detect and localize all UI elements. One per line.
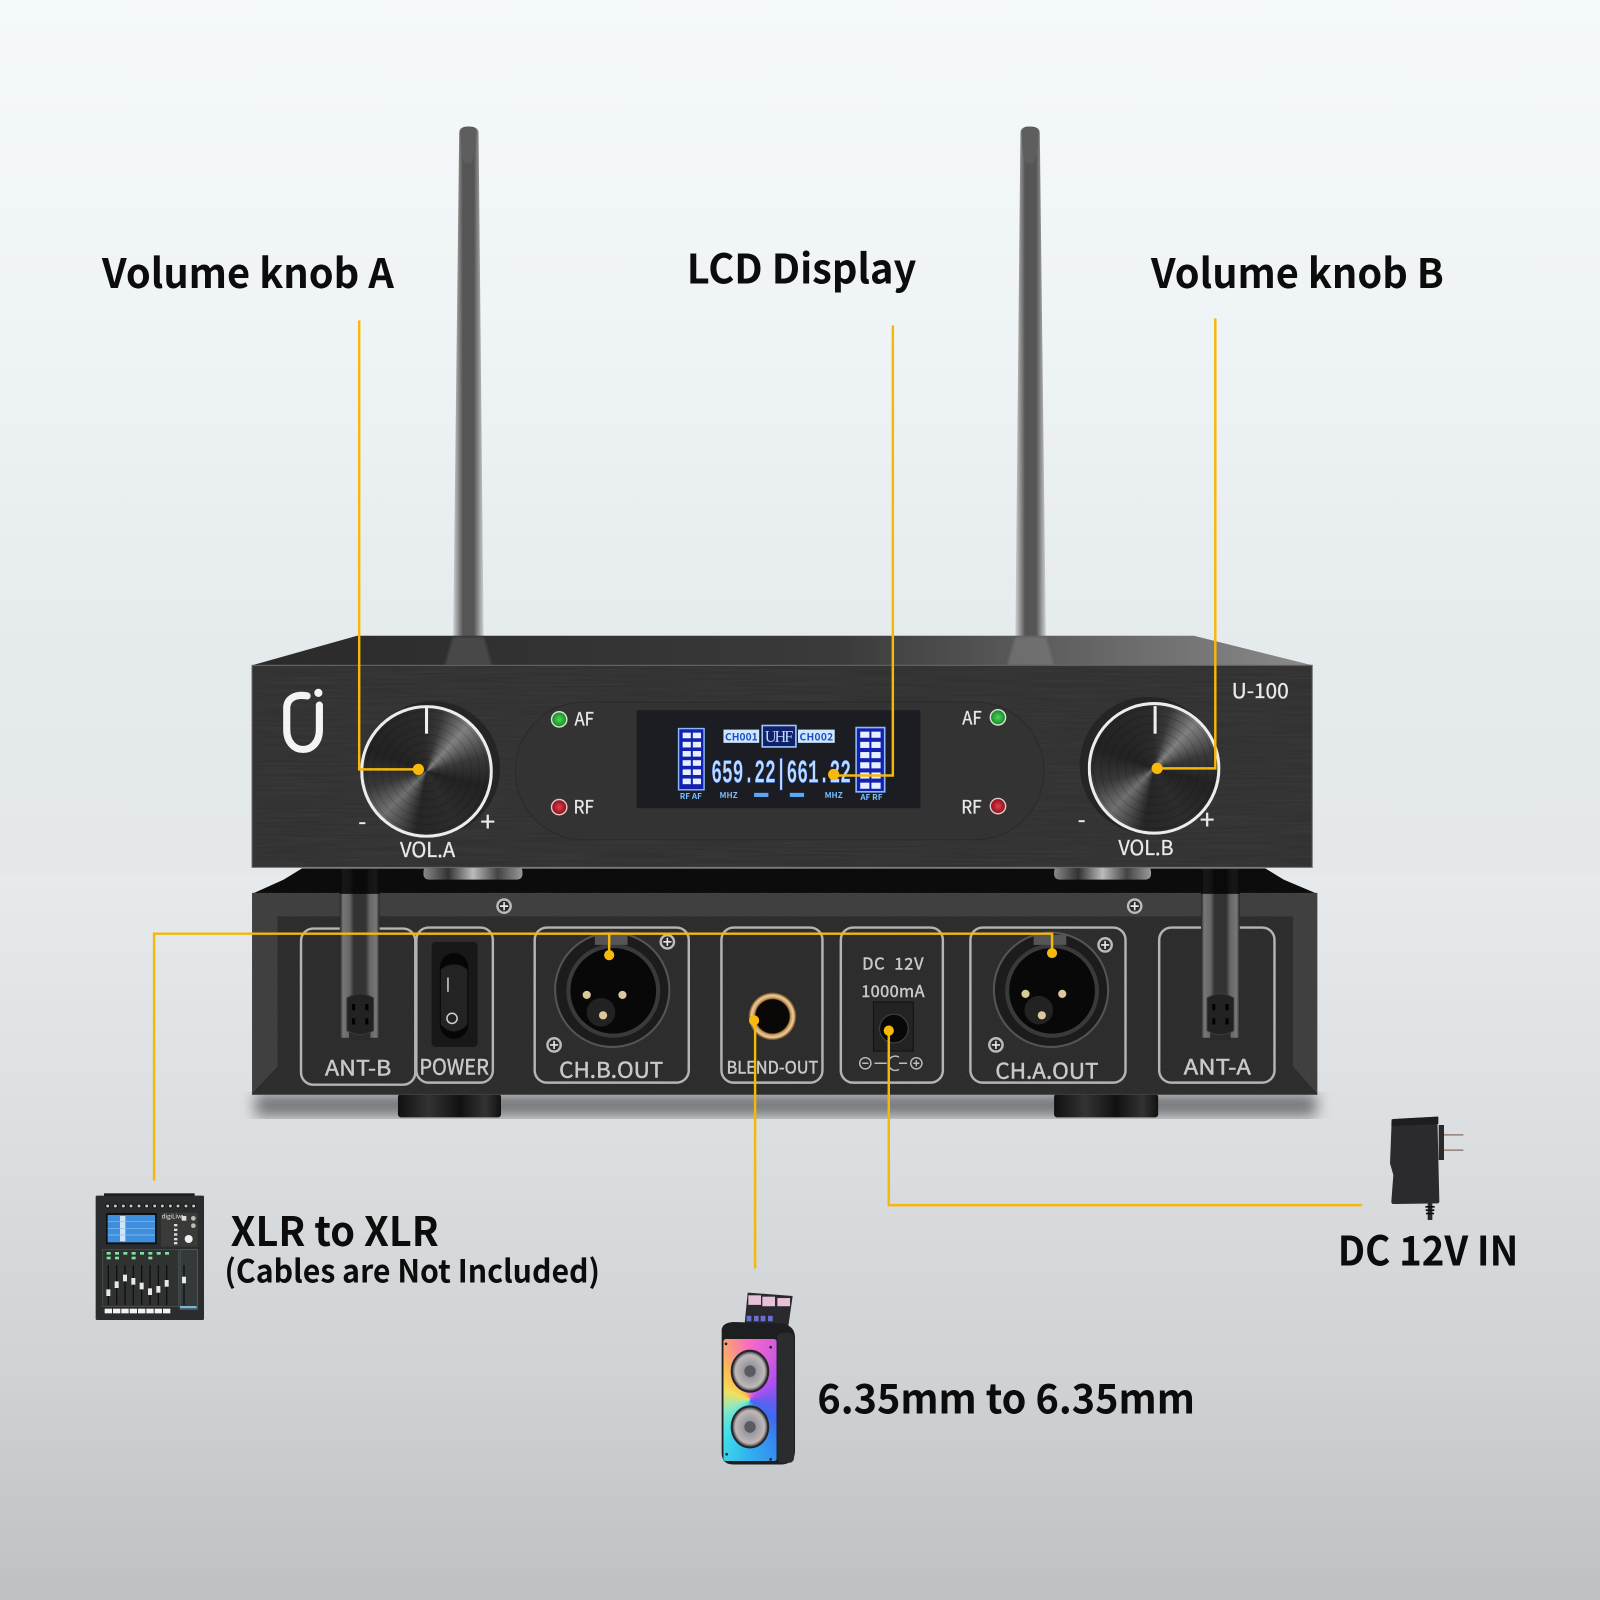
brushed texture bbox=[253, 666, 1311, 866]
label box: ANT-B bbox=[301, 929, 415, 1085]
LED RF left bbox=[552, 793, 594, 819]
label box: BLEND-OUT bbox=[721, 928, 822, 1083]
label box: ANT-A bbox=[1159, 928, 1274, 1083]
label box: CH.B.OUT bbox=[535, 928, 689, 1085]
small LCD captions: MHZ bbox=[720, 790, 738, 801]
oval centre panel bbox=[515, 702, 1044, 840]
label box: POWER bbox=[416, 928, 493, 1083]
frequency readout: 659.22|661.22 bbox=[711, 756, 851, 794]
rear chassis bbox=[252, 893, 1317, 1095]
power switch bbox=[432, 942, 478, 1047]
heading: Volume knob A: Volume knob A bbox=[101, 241, 395, 300]
rear grain bbox=[252, 893, 1317, 1095]
label: 6.35mm to 6.35mm: 6.35mm to 6.35mm bbox=[817, 1366, 1195, 1425]
LED AF left bbox=[552, 706, 594, 732]
label box: BLEND-OUT: BLEND-OUT bbox=[727, 1053, 818, 1078]
callout: XLR outputs bbox=[154, 934, 1057, 1181]
knob A bbox=[358, 701, 500, 863]
knob A: - bbox=[358, 805, 366, 837]
label box: DC input: DC 12V bbox=[862, 950, 924, 974]
antenna right bbox=[1015, 127, 1046, 643]
label box: POWER: POWER bbox=[419, 1050, 489, 1081]
small LCD captions: MHZ bbox=[825, 790, 843, 801]
knob B: + bbox=[1200, 799, 1215, 838]
label box: CH.A.OUT bbox=[970, 928, 1126, 1086]
screws bbox=[497, 899, 1141, 1052]
icon: party speaker bbox=[722, 1293, 795, 1465]
icon: mixer: digiLive bbox=[162, 1212, 184, 1221]
icon: mixer bbox=[96, 1193, 204, 1320]
callout: LCD Display bbox=[828, 326, 893, 780]
heading: Volume knob B: Volume knob B bbox=[1150, 241, 1444, 300]
label: DC 12V IN: DC 12V IN bbox=[1338, 1218, 1518, 1277]
heading: LCD Display: LCD Display bbox=[687, 237, 916, 296]
logo bbox=[287, 690, 321, 749]
LED RF left: RF bbox=[573, 793, 594, 819]
LED RF right: RF bbox=[961, 793, 982, 819]
rear feet bbox=[398, 1094, 1158, 1117]
channel labels bbox=[723, 726, 835, 747]
DC jack bbox=[873, 1002, 913, 1051]
small LCD captions: AF RF bbox=[859, 792, 883, 803]
label: XLR to XLR: XLR to XLR bbox=[231, 1199, 439, 1258]
LED AF right: AF bbox=[962, 704, 982, 730]
antenna bases reflection bbox=[445, 637, 1054, 665]
upper device: front panel bbox=[252, 636, 1312, 880]
channel labels: UHF bbox=[765, 727, 793, 746]
top plate bbox=[252, 636, 1312, 665]
LED AF left: AF bbox=[574, 706, 594, 732]
right level meter bbox=[856, 728, 885, 792]
callout: DC input bbox=[884, 1026, 1362, 1205]
channel labels: CH001 bbox=[725, 728, 758, 743]
antenna left bbox=[453, 127, 484, 643]
callout: Volume knob A bbox=[359, 320, 424, 775]
XLR connector A bbox=[994, 933, 1108, 1047]
label box: CH.B.OUT: CH.B.OUT bbox=[559, 1054, 663, 1085]
small LCD captions bbox=[680, 790, 883, 803]
LCD display bbox=[637, 710, 920, 808]
label box: ANT-A: ANT-A bbox=[1184, 1050, 1251, 1081]
callout: blend-out bbox=[749, 1015, 759, 1268]
icon: power adapter bbox=[1390, 1117, 1463, 1220]
front feet bbox=[423, 866, 1151, 880]
knob B: - bbox=[1078, 803, 1086, 835]
knob A: + bbox=[480, 801, 495, 840]
rear antenna B bbox=[340, 869, 380, 1040]
knob B bbox=[1078, 697, 1220, 861]
rear antenna A bbox=[1201, 869, 1240, 1040]
LED AF right bbox=[962, 704, 1006, 730]
rear top edge bbox=[252, 868, 1317, 894]
lower device: rear panel bbox=[252, 868, 1317, 1117]
callout: Volume knob B bbox=[1152, 318, 1215, 774]
label box: DC input: 1000mA bbox=[861, 978, 925, 1002]
left level meter bbox=[679, 729, 704, 790]
channel labels: CH002 bbox=[799, 728, 833, 743]
knob A: VOL.A bbox=[400, 833, 456, 863]
knob B: VOL.B bbox=[1118, 831, 1173, 861]
XLR connector B bbox=[555, 933, 669, 1047]
small LCD captions: RF AF bbox=[680, 791, 702, 802]
label box: CH.A.OUT: CH.A.OUT bbox=[995, 1055, 1099, 1086]
label box: DC input bbox=[841, 928, 943, 1083]
label box: ANT-B: ANT-B bbox=[325, 1052, 391, 1083]
model label: U-100 bbox=[1232, 674, 1289, 704]
LED RF right bbox=[961, 793, 1006, 819]
rear recessed plate bbox=[252, 916, 1317, 1094]
blend-out jack bbox=[748, 992, 797, 1041]
front chassis bbox=[252, 665, 1312, 867]
label: cables note: (Cables are Not Included) bbox=[224, 1247, 600, 1293]
